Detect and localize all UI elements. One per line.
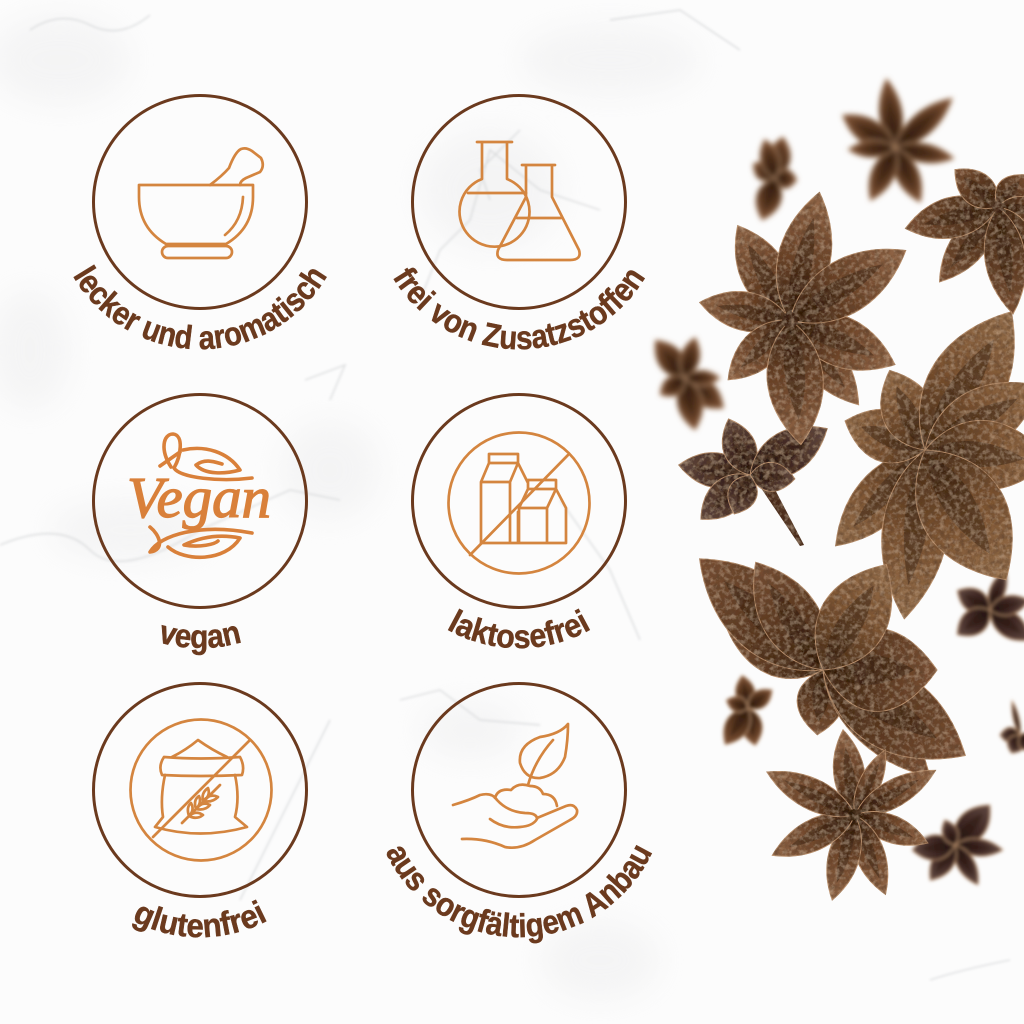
icon: hand with seedling [453,724,577,848]
bottom star anise [760,728,942,904]
label: lecker und aromatisch [73,264,327,350]
icon: mortar and pestle [139,148,263,258]
label: glutenfrei [132,900,267,938]
icon: Vegan lettering with leaves: Vegan [127,465,271,530]
blurred star anise: edge fragment [1000,700,1024,757]
label: laktosefrei [448,608,590,649]
badge: lecker und aromatisch [73,94,327,350]
badge: vegan [92,393,308,656]
dark star anise with stem [676,410,838,546]
star anise cluster [646,77,1024,904]
badge: laktosefrei [411,393,627,649]
blurred star anise: small top left [748,135,798,224]
ring [94,96,306,308]
large wrinkled star anise [817,292,1024,623]
badge: glutenfrei [92,682,308,938]
blurred star anise: top [836,77,960,207]
blurred star anise: small lower left [715,674,777,751]
icon: crossed out milk cartons [448,432,590,574]
ring [94,394,306,608]
badge: aus sorgfältigem Anbau [386,682,652,944]
ring [412,394,626,608]
blurred star anise: right edge [950,567,1024,650]
badge: frei von Zusatzstoffen [394,94,645,350]
blurred star anise: left [646,332,731,432]
ring [412,96,626,308]
label: aus sorgfältigem Anbau [386,844,652,944]
label: frei von Zusatzstoffen [394,268,645,350]
ring [412,684,626,896]
ring [94,684,306,896]
main star anise [696,187,920,447]
icon: crossed out flour sack [130,720,272,860]
icon: laboratory flasks [460,142,580,260]
label: vegan [162,624,241,656]
star anise: top right [901,157,1024,317]
blurred star anise: lower right [911,796,1004,889]
bottom large star anise [676,532,985,794]
icon: Vegan lettering with leaves [127,434,271,557]
